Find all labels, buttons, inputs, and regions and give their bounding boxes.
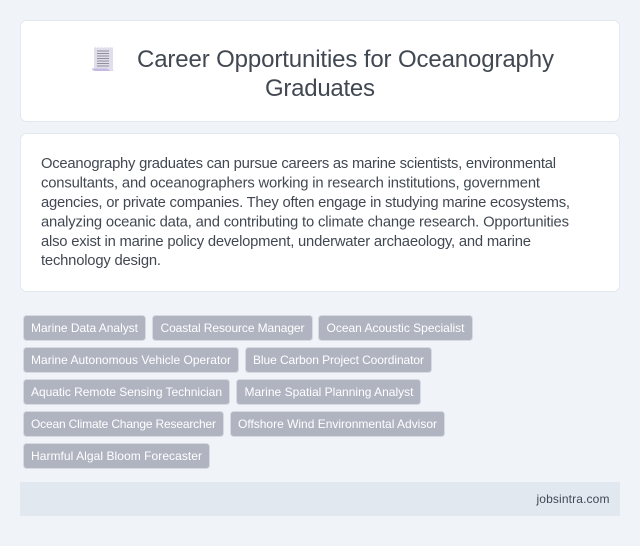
tag [24,412,224,436]
tag [24,380,230,404]
tag: Marine Autonomous Vehicle Operator [31,353,231,367]
description text [41,156,570,269]
description text: also exist in marine policy development, underwater archaeology, and marine [41,234,531,250]
footer bar [20,482,620,516]
icon: document scroll [92,47,114,71]
tag [236,380,420,404]
tag [24,348,238,372]
tag [24,316,146,340]
title text: Career Opportunities for Oceanography [137,46,554,73]
tag: Marine Spatial Planning Analyst [244,385,414,399]
tag list [24,316,472,468]
tag: Coastal Resource Manager [160,321,304,335]
tag: Offshore Wind Environmental Advisor [238,417,437,431]
title text: Graduates [265,75,375,102]
tag: Ocean Climate Change Researcher [31,417,216,431]
description text: consultants, and oceanographers working in research institutions, government [41,176,540,192]
panel: title card [20,20,620,122]
description text: technology design. [41,253,161,269]
tag [230,412,444,436]
title text [137,46,554,102]
description text: Oceanography graduates can pursue careers as marine scientists, environmental [41,156,556,172]
tag: Marine Data Analyst [31,321,139,335]
tag [152,316,312,340]
tag: Ocean Acoustic Specialist [326,321,465,335]
tag [318,316,472,340]
description text: agencies, or private companies. They often engage in studying marine ecosystems, [41,195,570,211]
tag: Harmful Algal Bloom Forecaster [31,449,202,463]
description text: analyzing oceanic data, and contributing to climate change research. Opportunities [41,214,569,230]
footer source text: jobsintra.com [536,492,610,506]
tag [246,348,432,372]
tag [24,444,210,468]
tag: Blue Carbon Project Coordinator [253,353,424,367]
panel: description [20,134,620,292]
tag: Aquatic Remote Sensing Technician [31,385,222,399]
